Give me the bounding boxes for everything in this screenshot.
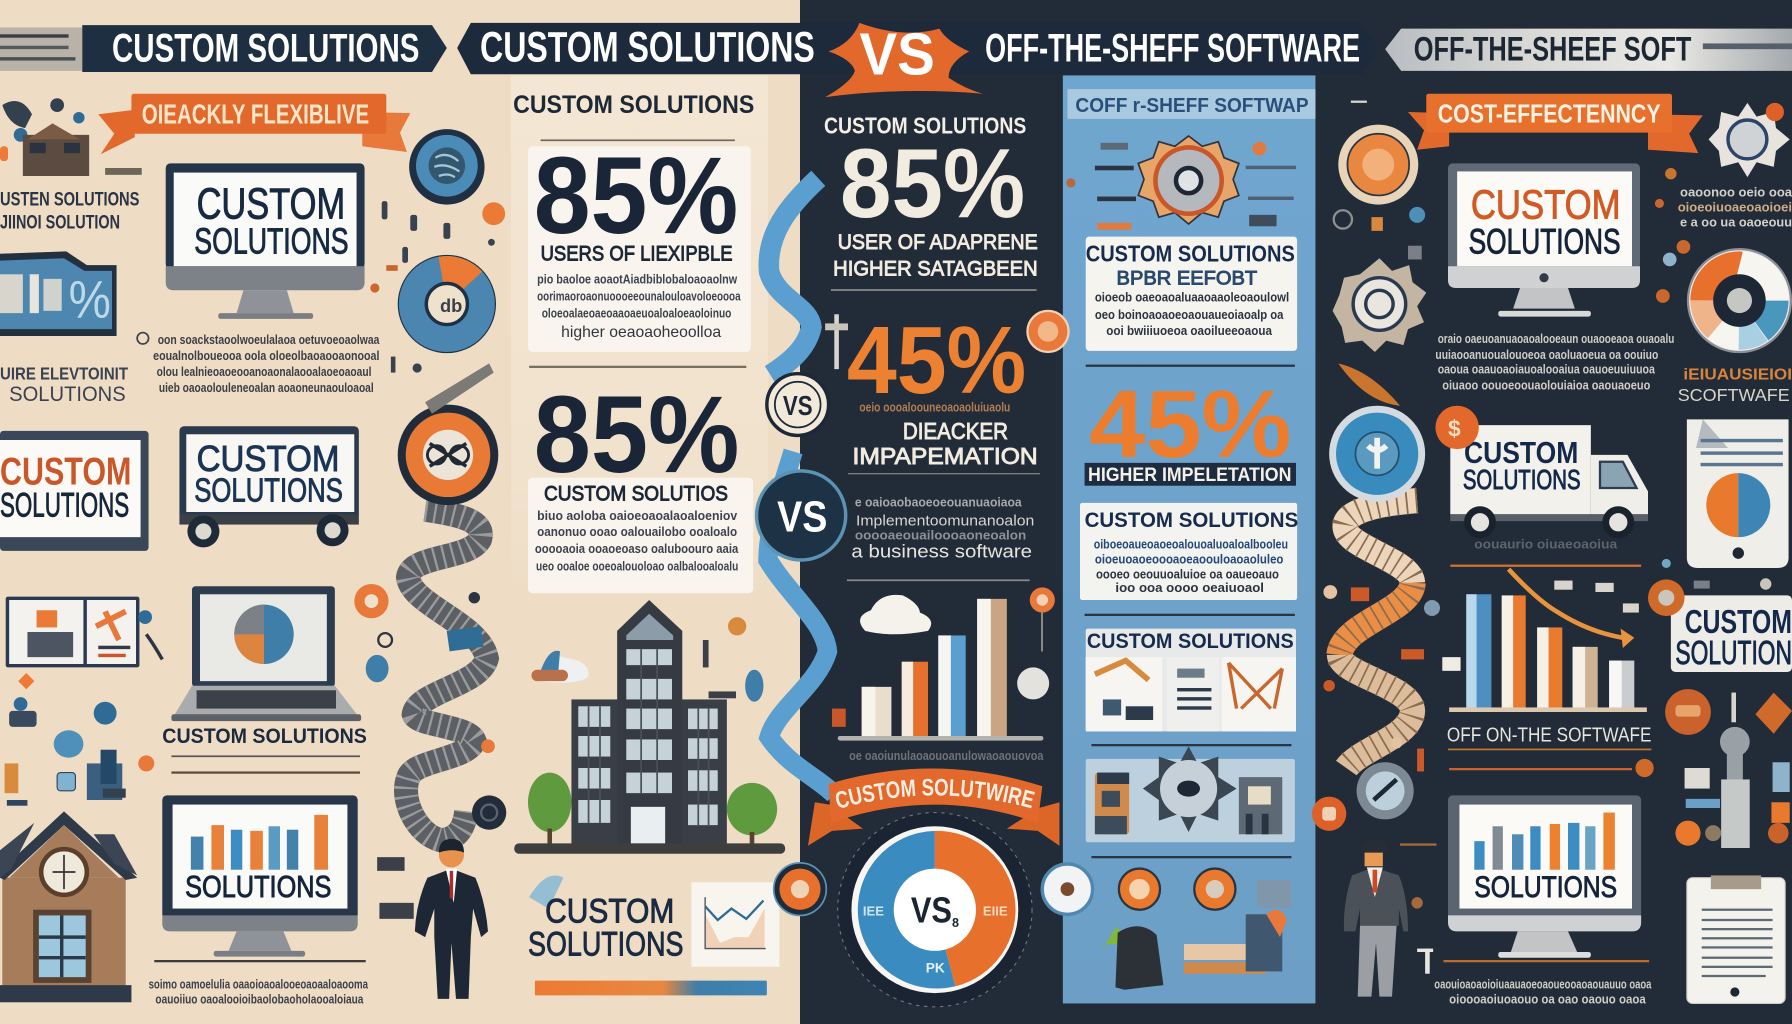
- icons: scattered right cluster: [1662, 559, 1792, 848]
- text block: right mini lines: e a oo ua oaoeouu: [1680, 214, 1792, 229]
- monitor: custom solutions cream left: CUSTOM: [197, 180, 345, 228]
- text block: right mini lines: [1678, 185, 1792, 229]
- card: custom solutions blue column mid: oioeuoaoeoooaoeaoouloaoaoluleo: [1095, 551, 1283, 566]
- icons: scattered around right bar chart: [1323, 581, 1639, 771]
- panel: center dark stats top: USER OF ADAPRENE: [838, 229, 1038, 254]
- panel: center 45% orange stat: DIEACKER: [903, 418, 1008, 444]
- monitor: custom solutions dark right: SOLUTIONS: [1469, 222, 1621, 262]
- card: 85% stat top paper: [513, 91, 754, 352]
- truck: custom solutions dark: CUSTOM: [1464, 435, 1578, 470]
- truck: custom solutions dark: [1450, 425, 1648, 538]
- text and chart: custom solutions lower right of cream: SOLUTIONS: [528, 925, 683, 963]
- icon: blue gear badge: [409, 129, 485, 205]
- monitor: bar chart solutions dark: SOLUTIONS: [1474, 871, 1617, 904]
- ribbon: flexibility: OIEACKLY FLEXIBLIVE: [142, 98, 369, 129]
- monitor: orange custom solutions cut off: CUSTOM: [0, 451, 131, 494]
- chart: VS pie: EIIE: [983, 903, 1008, 918]
- text and chart: custom solutions lower right of cream: CUSTOM: [545, 892, 674, 930]
- text block: right paragraph under monitor: oraio oaeuoanuaoaoalooeaun ouaooeaoa ouaoalu: [1438, 331, 1674, 346]
- panel: center 45% orange stat: oeio oooaloouneoaoaoluiuaolu: [859, 399, 1010, 414]
- divider lines under laptop: [171, 755, 360, 774]
- ribbon: cost-effectiveness: COST-EFFECTENNCY: [1438, 98, 1661, 128]
- panel: center 45% orange stat: 45%: [847, 307, 1026, 414]
- icons: small marks beside monitor: [137, 201, 495, 373]
- card: 85% stat top paper: higher oeaoaoheoolloa: [561, 324, 721, 341]
- text block: center business software: e oaioaobaoeoeouanuaoiaoa: [855, 494, 1022, 509]
- monitor: orange custom solutions cut off: SOLUTIONS: [0, 487, 129, 525]
- left header fragment: [0, 27, 82, 71]
- card: 85% stat lower paper: [528, 374, 753, 593]
- icon: small grey disc badge: [1357, 762, 1414, 819]
- blue ribbon helix: [768, 178, 834, 794]
- card: custom solutions blue column mid: ioo ooa oooo oeaiuoaol: [1115, 580, 1264, 595]
- icons: top left cluster: [0, 98, 142, 176]
- icon: small orange badge: [1312, 797, 1346, 831]
- heading banner: custom solutions 1: CUSTOM SOLUTIONS: [112, 27, 419, 71]
- document with pie: [1687, 419, 1789, 568]
- monitor: custom solutions cream left: SOLUTIONS: [194, 221, 349, 262]
- card: custom solutions blue column mid: CUSTOM SOLUTIONS: [1085, 507, 1298, 532]
- text block: left solutions label: UIRE ELEVTOINIT: [0, 363, 128, 383]
- divider with dots: [529, 366, 746, 368]
- divider: [1085, 614, 1295, 616]
- progress bar orange to blue: [535, 981, 767, 995]
- text block: paragraph under monitor: eoualnolboueooa oola oloeolbaoaooaonooal: [153, 348, 379, 363]
- heading banner: center strip: [457, 23, 1378, 74]
- label: off on the software: OFF ON-THE SOFTWAFE: [1447, 724, 1651, 747]
- icon: orange spiral badge: [1338, 125, 1418, 205]
- card: custom solutions blue column top: BPBR EEFOBT: [1117, 268, 1257, 290]
- VS ribbon title: VS: [859, 20, 935, 87]
- panel: center dark stats top: CUSTOM SOLUTIONS: [824, 113, 1026, 139]
- text block: bottom lines left: soimo oamoelulia oaaoioaoalooeoaoaaloaooma: [149, 977, 369, 992]
- card: custom solutions blue column top: CUSTOM SOLUTIONS: [1086, 241, 1295, 267]
- monitor: custom solutions dark right: CUSTOM: [1471, 181, 1621, 227]
- chart: VS pie: [838, 813, 1032, 1007]
- icon: white gear top right: [1709, 103, 1790, 177]
- text block: paragraph under monitor: oon soackstaoolwoeulalaoa oetuvoeoaolwaa: [158, 332, 380, 347]
- monitor: bar chart solutions cream: [162, 795, 358, 957]
- background: cream left half: [0, 0, 800, 1024]
- card: 85% stat lower paper: CUSTOM SOLUTIOS: [544, 481, 728, 506]
- text block: bottom lines right: oioooaoiuoaouo oa oao oaouo oaoa: [1449, 991, 1646, 1006]
- building illustration: [514, 600, 785, 854]
- truck: custom solutions cream: SOLUTIONS: [194, 473, 343, 510]
- text block: right mini lines: oaoonoo oeio ooa: [1680, 185, 1792, 200]
- text block: bottom lines right: oaouioaoaoioiuaauaoeoaoueooaoaouauuo oaoa: [1434, 977, 1652, 992]
- businessman dark suit: [415, 839, 488, 999]
- truck: custom solutions dark: SOLUTIONS: [1463, 464, 1581, 495]
- label: custom solutions under laptop: CUSTOM SOLUTIONS: [162, 723, 367, 748]
- header strip: coff-shelf software: COFF r-SHEFF SOFTWAP: [1075, 94, 1309, 117]
- chart: center bars with cloud: [838, 579, 1044, 763]
- truck: custom solutions cream: [179, 426, 359, 547]
- panel: center dark stats top: HIGHER SATAGBEEN: [833, 255, 1038, 280]
- VS badge large: VS: [777, 493, 827, 541]
- icon: orange badge on truck: [1435, 406, 1479, 449]
- icon: orange badge near card: [1648, 579, 1685, 616]
- icons: cloud and glasses: [531, 617, 763, 702]
- card: custom solutions three tiles: CUSTOM SOLUTIONS: [1087, 628, 1294, 653]
- heading banner: center strip: OFF-THE-SHEFF SOFTWARE: [985, 27, 1360, 71]
- ribbon: custom solutwire orange arc: CUSTOM SOLUTWIRE: [836, 778, 1035, 808]
- chart: right ring pie: [1688, 249, 1791, 352]
- chart: orange ring badge: [398, 405, 498, 505]
- panel: paper column behind statistics: [511, 75, 768, 613]
- ribbon: custom solutwire orange arc: [808, 768, 1060, 846]
- card: 85% stat lower paper: ueo ooaloe ooeoalouoloao oalbalooaloalu: [536, 558, 738, 573]
- text block: center business software: Implementoomunanoalon: [856, 514, 1034, 530]
- text block: software label right: iEIUAUSIEIOI: [1683, 366, 1792, 383]
- text block: left solutions label: [0, 363, 128, 406]
- monitor: bar chart solutions cream: SOLUTIONS: [185, 869, 331, 904]
- panel: small report screen: [6, 597, 139, 667]
- text block: center business software: [851, 494, 1034, 562]
- text block: center business software: a business software: [851, 541, 1032, 562]
- panel: center 45% orange stat: IMPAPEMATION: [853, 443, 1038, 469]
- VS badge small: [767, 374, 829, 435]
- clipboard: [1687, 875, 1785, 1003]
- card: custom solutions three tiles: [1086, 628, 1296, 731]
- text line under truck: oouaurio oiuaeoaoiua: [1474, 537, 1618, 552]
- text block: paragraph under monitor: [153, 332, 380, 395]
- monitor: bar chart solutions dark: [1448, 795, 1641, 958]
- icon: orange badge on truck: $: [1448, 416, 1461, 442]
- icon: orange gear small: [354, 584, 389, 618]
- card: custom solutions blue column top: [1086, 237, 1297, 367]
- text block: bottom lines left: [149, 960, 369, 1006]
- helix: grey ribbon left: [406, 510, 487, 840]
- panel: center dark stats top: 85%: [840, 128, 1025, 238]
- card: custom solutions blue column mid: oooeo oeouuoaluioe oa oaueoauo: [1096, 566, 1279, 581]
- text block: left mini solutions: JIINOI SOLUTION: [0, 212, 120, 234]
- card: 85% stat lower paper: 85%: [534, 374, 739, 496]
- laptop with pie: [171, 586, 361, 721]
- icon: orange badge center left: [774, 863, 826, 915]
- text block: paragraph under monitor: olou lealnieoaoeooanoaonalaooalaoeoaoaul: [157, 364, 371, 379]
- card: custom solutions blue column mid: [1080, 503, 1298, 600]
- text block: right paragraph under monitor: oiuaoo oouoeoouaolouiaioa oaouaoeuo: [1442, 378, 1650, 393]
- chart: VS pie: 8: [952, 916, 959, 930]
- truck: custom solutions cream: CUSTOM: [197, 438, 339, 479]
- text block: left mini solutions: USTEN SOLUTIONS: [0, 189, 139, 211]
- card: 85% stat top paper: CUSTOM SOLUTIONS: [513, 91, 754, 119]
- divider lines with ticks orange: [1448, 749, 1654, 777]
- ribbon: cost-effectiveness: [1408, 94, 1703, 153]
- icon: orange gear with side items: [1066, 136, 1296, 230]
- text block: software label right: [1678, 366, 1792, 405]
- text block: paragraph under monitor: uieb oaoaolouleneoalan aoaoneunaouloaoal: [159, 380, 374, 395]
- helix: tan and orange ribbon right: [1339, 501, 1417, 768]
- card: 85% stat top paper: oloeoalaeoaeoaaoaeuoaloaloeaoloinuo: [542, 306, 731, 321]
- card: gear and images: [1086, 746, 1295, 842]
- panel: center 45% orange stat: [847, 307, 1040, 474]
- icon: blue circular badge: [1329, 406, 1425, 502]
- icons: scattered by person right: [1400, 843, 1437, 974]
- text block: right paragraph under monitor: [1435, 331, 1674, 393]
- card: custom solutions blue column top: oeo boinoaoaoeoaouaueoiaoalp oa: [1095, 307, 1284, 322]
- chart: VS pie: PK: [926, 961, 945, 976]
- text block: left solutions label: SOLUTIONS: [9, 381, 126, 406]
- chart: center bars with cloud: oe oaoiunulaoaouoanulowaoaouovoa: [849, 748, 1044, 763]
- VS badge small: VS: [783, 390, 813, 421]
- text block: right paragraph under monitor: uuiaooanuoualouoeoa oaoluaoeua oa oouiuo: [1435, 347, 1658, 362]
- divider: [1091, 744, 1291, 746]
- card: 85% stat lower paper: oanonuo ooao oalouailobo ooaloalo: [537, 524, 737, 539]
- card: 85% stat top paper: USERS OF LIEXIPBLE: [541, 241, 733, 266]
- text block: right mini lines: oioeoiuoaeoaoioei: [1678, 199, 1792, 214]
- businessman grey suit: [1344, 839, 1408, 997]
- card: 85% stat lower paper: biuo aoloba oaioeoaoalaoaloeniov: [537, 508, 738, 523]
- icons: scattered dark left: [1334, 101, 1690, 406]
- card: blue percent stat: [0, 251, 117, 336]
- icons: center candle and badge: [825, 311, 1069, 369]
- card: 85% stat lower paper: ooooaoia ooaoeoaso oaluboouro aaia: [535, 541, 739, 556]
- panel: center dark stats top: [824, 113, 1038, 291]
- chart: VS pie: VS: [911, 889, 952, 930]
- monitor: orange custom solutions cut off: [0, 431, 149, 551]
- chart: blue and orange donut: [398, 255, 496, 353]
- card: custom solutions blue column top: ooi bwiiiuoeoa oaoilueeoaoua: [1106, 323, 1273, 338]
- text block: bottom lines left: oauoiiuo oaoalooioibaolobaoholaooaloiaua: [155, 991, 364, 1006]
- divider: [1091, 856, 1291, 858]
- icon: beige gear badge: [1333, 258, 1426, 352]
- card: custom solution right: [1671, 595, 1792, 672]
- house illustration: [0, 811, 137, 1002]
- panel: blue off-the-shelf column: [1063, 75, 1315, 1003]
- icons: pencil sketch: [425, 363, 494, 414]
- card: custom solutions blue column top: oioeob oaeoaoaluaaoaaoleoaoulowl: [1095, 290, 1289, 305]
- card: custom solutions blue column mid: oiboeoaueoaoeoalouoaluoaloalbooleu: [1094, 537, 1288, 552]
- text block: center business software: ooooaeouailoooaoneoalon: [855, 527, 1026, 542]
- icon: orange dot badge: [482, 202, 505, 225]
- chart: VS pie: IEE: [863, 903, 884, 918]
- monitor: custom solutions dark right: [1448, 163, 1640, 317]
- icon: white blue badge center right: [1042, 864, 1093, 914]
- stat: 45% on blue: 45%: [1089, 371, 1291, 478]
- text block: software label right: SCOFTWAFE: [1678, 385, 1790, 405]
- VS badge large: [757, 471, 846, 560]
- card: blue percent stat: %: [69, 271, 111, 330]
- card: 85% stat top paper: pio baoloe aoaotAiadbiblobaloaoaolnw: [537, 271, 738, 286]
- monitor: custom solutions cream left: [166, 163, 365, 319]
- text block: right paragraph under monitor: oaoua oaauoaoiauoalooaiua oauoeuuiuuoa: [1438, 362, 1655, 377]
- background: dark right half: [800, 0, 1792, 1024]
- chart: right bars with declining arrow: [1449, 565, 1647, 712]
- chart: blue and orange donut: db: [440, 295, 462, 316]
- card: 85% stat top paper: 85%: [534, 135, 738, 257]
- icons: blue column bottom scene: [1103, 869, 1291, 990]
- VS ribbon title: [825, 20, 983, 97]
- text block: left mini solutions: [0, 189, 139, 234]
- heading banner: off-the-shelf silver: OFF-THE-SHEEF SOFT: [1414, 31, 1691, 69]
- icons: scattered mid cluster: [366, 592, 506, 919]
- heading banner: center strip: CUSTOM SOLUTIONS: [480, 24, 815, 71]
- icons: chart side badges: [832, 587, 1055, 727]
- stat: 45% on blue: HIGHER IMPELETATION: [1088, 464, 1291, 486]
- card: 85% stat top paper: oorimaoroaonuoooeeounalouloavoloeoooa: [537, 289, 741, 304]
- icons: scattered left cluster: [5, 610, 162, 806]
- ribbon: flexibility: [98, 94, 410, 154]
- text and chart: custom solutions lower right of cream: [528, 875, 779, 967]
- text block: bottom lines right: [1434, 960, 1652, 1006]
